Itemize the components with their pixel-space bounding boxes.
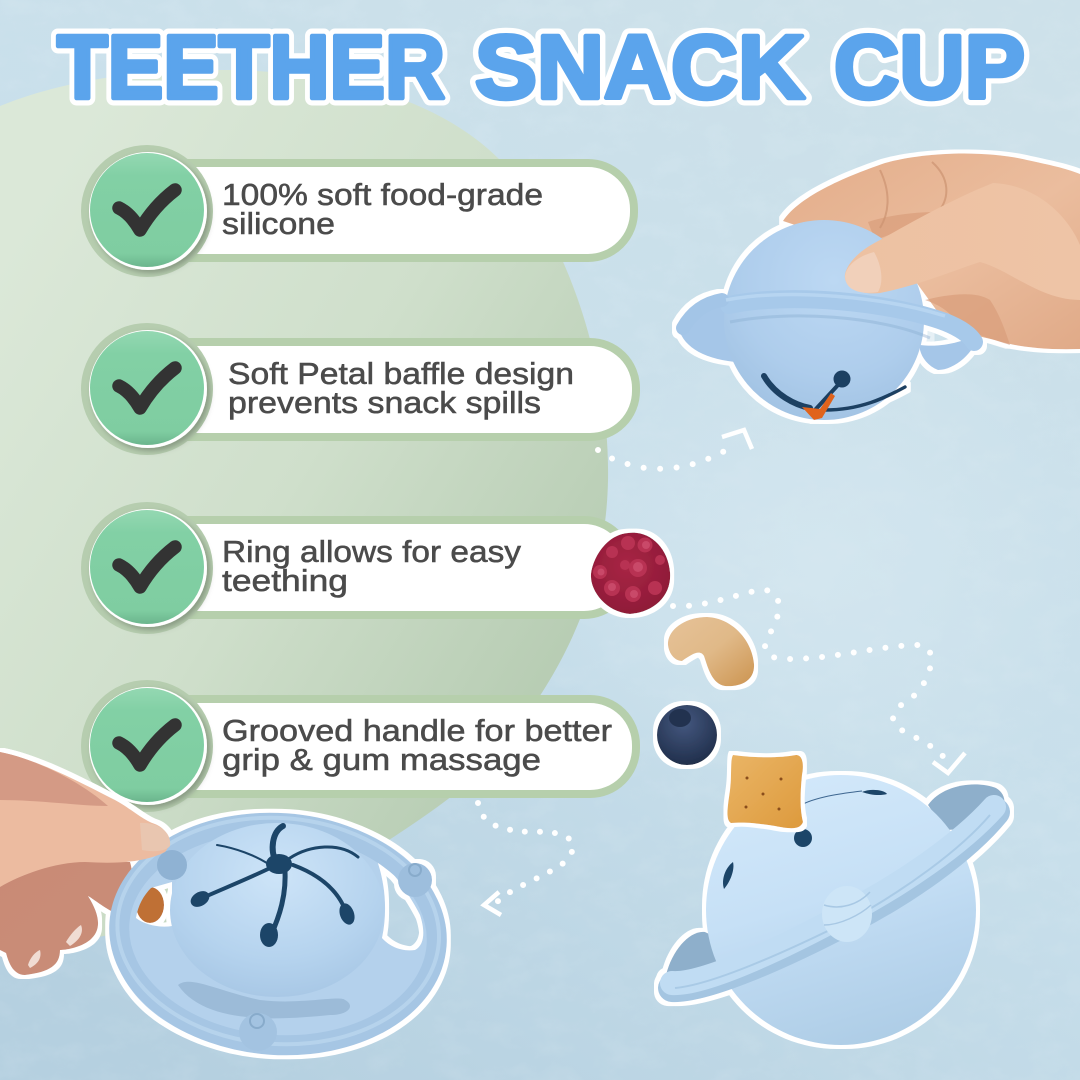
feature row 1 xyxy=(81,145,634,277)
node xyxy=(398,863,432,897)
node xyxy=(239,1013,277,1051)
toy: top view xyxy=(110,807,447,1056)
photo: toy with ring, bottom right xyxy=(666,775,1005,1045)
title: CUP xyxy=(834,18,1025,118)
green blob xyxy=(0,70,608,952)
food: cashew xyxy=(668,617,754,686)
ring node xyxy=(822,886,872,942)
title: CUP xyxy=(834,18,1025,118)
text: row 4: grip & gum massage xyxy=(222,742,541,777)
feature row 2 xyxy=(81,323,636,455)
badge: row 3 xyxy=(81,502,213,634)
holes xyxy=(794,829,812,847)
food: cracker xyxy=(727,755,803,828)
text: row 3 xyxy=(222,534,522,598)
ring shadow xyxy=(672,812,996,988)
text: row 1: silicone xyxy=(222,206,335,241)
lower fingers xyxy=(0,860,132,975)
text: row 2: Soft Petal baffle design xyxy=(228,356,574,391)
feature row 4 xyxy=(81,680,636,812)
title: SNACK xyxy=(475,18,805,118)
ring band xyxy=(672,807,994,983)
badge: row 2 xyxy=(81,323,213,455)
photo: hand holding toy, bottom left xyxy=(0,752,447,1056)
title: SNACK xyxy=(475,18,805,118)
petal slits xyxy=(764,376,905,410)
photo: hand holding toy, top right xyxy=(678,154,1080,420)
text: row 2 xyxy=(228,356,574,420)
back loop left xyxy=(666,932,718,990)
dome xyxy=(706,775,976,1045)
back loop right xyxy=(928,784,1005,830)
pill: row 2 xyxy=(140,342,636,437)
food: blueberry xyxy=(657,705,717,765)
hand xyxy=(783,154,1080,349)
text: row 3: teething xyxy=(222,563,348,598)
food: raspberry xyxy=(591,533,670,614)
text: row 4: Grooved handle for better xyxy=(222,713,612,748)
node xyxy=(157,850,187,880)
petal slits xyxy=(200,826,358,935)
title: TEETHER xyxy=(57,18,445,118)
badge: row 4 xyxy=(81,680,213,812)
pill: row 3 xyxy=(140,520,630,615)
pill: row 4 xyxy=(140,699,636,794)
arrow: dotted food path to lower toy xyxy=(673,590,965,773)
feature row 3 xyxy=(81,502,630,634)
arrow: dotted to top toy xyxy=(598,430,752,469)
text: row 4 xyxy=(222,713,612,777)
pill: row 1 xyxy=(140,163,634,258)
text: row 2: prevents snack spills xyxy=(228,385,541,420)
arrow: dotted to lower-left toy xyxy=(478,803,573,915)
text: row 1: 100% soft food-grade xyxy=(222,177,543,212)
text: row 3: Ring allows for easy xyxy=(222,534,522,569)
badge: row 1 xyxy=(81,145,213,277)
text: row 1 xyxy=(222,177,543,241)
thumb and palm xyxy=(0,752,169,887)
thumb xyxy=(845,183,1080,300)
toy: side view xyxy=(678,220,978,420)
title: TEETHER xyxy=(57,18,445,118)
title xyxy=(57,18,1025,118)
